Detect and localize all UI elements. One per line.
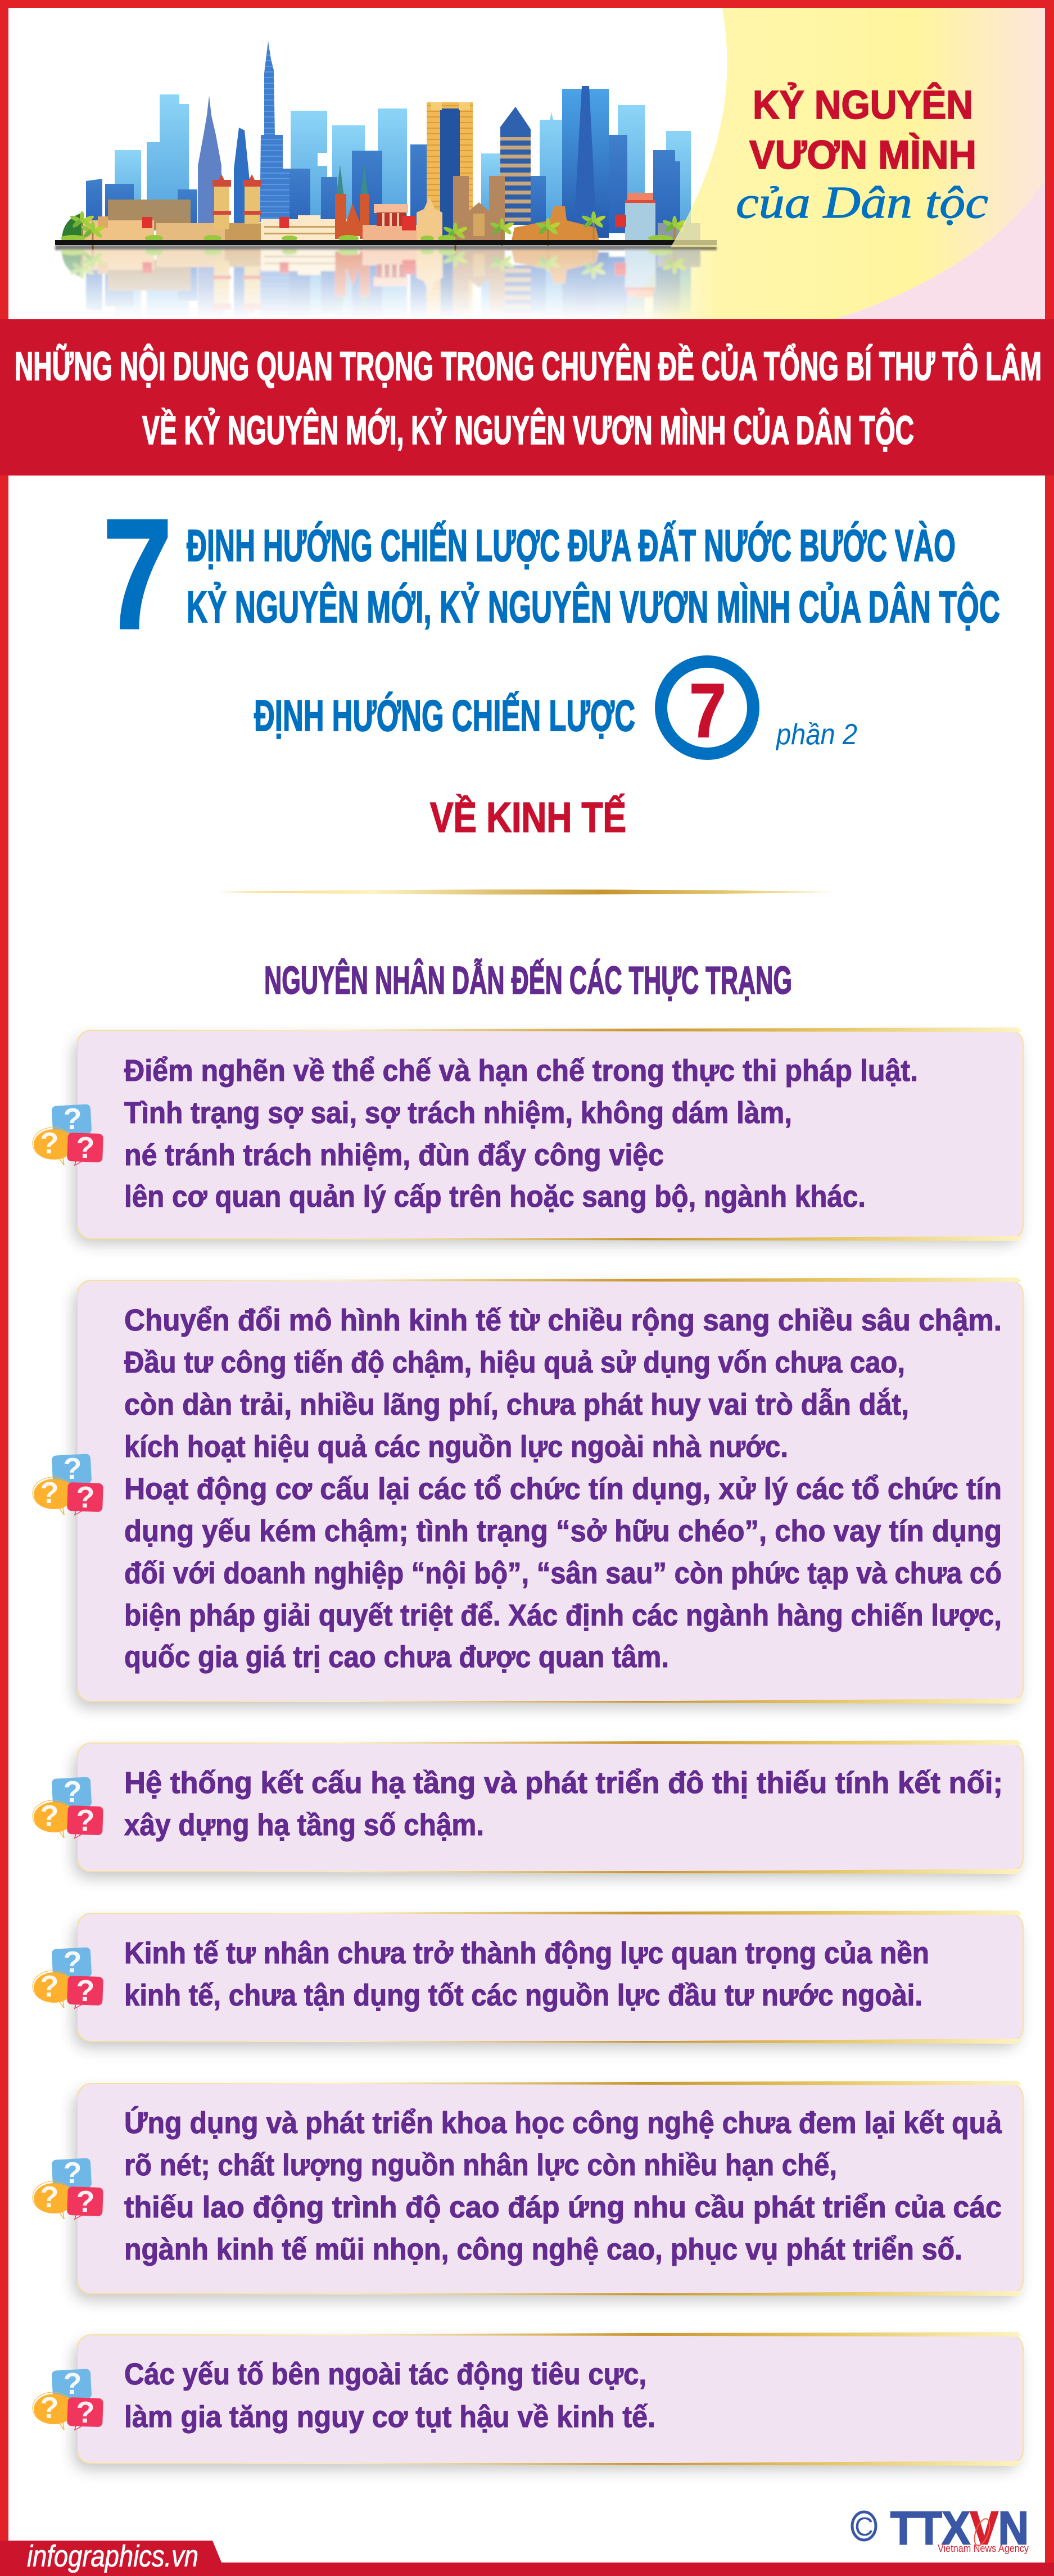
logo: TTXVN: C — [854, 2512, 874, 2541]
orientation heading with numbered circle: 7 — [689, 668, 726, 753]
card 5 text: ngành kinh tế mũi nhọn, công nghệ cao, phục vụ phát triển số. — [124, 2233, 962, 2266]
icon: question bubbles: ? — [40, 2391, 58, 2425]
card 4 text: Kinh tế tư nhân chưa trở thành động lực quan trọng của nền — [124, 1936, 929, 1970]
card 3 — [33, 1740, 1023, 1877]
card 6 text: Các yếu tố bên ngoài tác động tiêu cực, — [124, 2357, 646, 2391]
translucent yellow over skyline — [670, 8, 727, 247]
card 2 text: Đầu tư công tiến độ chậm, hiệu quả sử dụng vốn chưa cao, — [124, 1346, 905, 1379]
card 2 — [33, 1278, 1023, 1707]
big number 7: 7 — [102, 487, 173, 662]
icon: question bubbles — [33, 1452, 103, 1515]
icon: question bubbles: ? — [40, 1799, 58, 1833]
card 5 text: thiếu lao động trình độ cao đáp ứng nhu cầu phát triển của các — [124, 2190, 1002, 2224]
icon: question bubbles: ? — [40, 1970, 58, 2003]
section title — [187, 520, 1000, 632]
card 6 — [33, 2332, 1023, 2469]
subheading: economy: VỀ KINH TẾ — [430, 794, 626, 841]
hero title: VƯƠN MÌNH — [749, 133, 976, 178]
icon: question bubbles: ? — [63, 1452, 82, 1486]
card 2 text: kích hoạt hiệu quả các nguồn lực ngoài nhà nước. — [124, 1430, 788, 1464]
card 5 text: rõ nét; chất lượng nguồn nhân lực còn nhiều hạn chế, — [124, 2148, 837, 2182]
icon: question bubbles — [33, 1945, 103, 2008]
card 4 text: kinh tế, chưa tận dụng tốt các nguồn lực đầu tư nước ngoài. — [124, 1979, 922, 2012]
icon: question bubbles — [33, 1775, 103, 1838]
card 2 text — [124, 1303, 1002, 1674]
logo: TTXVN: TTXVN — [890, 2502, 1029, 2554]
gold divider — [219, 889, 837, 895]
card 1 text: lên cơ quan quản lý cấp trên hoặc sang bộ, ngành khác. — [124, 1180, 866, 1214]
card 3 text: xây dựng hạ tầng số chậm. — [124, 1808, 484, 1842]
red banner heading — [0, 319, 1054, 476]
card 2 text: dụng yếu kém chậm; tình trạng “sở hữu chéo”, cho vay tín dụng — [124, 1514, 1002, 1548]
card 1 text: Điểm nghẽn về thể chế và hạn chế trong thực thi pháp luật. — [124, 1054, 918, 1088]
card 5 — [33, 2081, 1023, 2299]
icon: question bubbles: ? — [76, 1974, 94, 2008]
logo: TTXVN: Vietnam News Agency — [938, 2543, 1029, 2554]
card 2 text: còn dàn trải, nhiều lãng phí, chưa phát huy vai trò dẫn dắt, — [124, 1388, 909, 1421]
card 4 text — [124, 1936, 929, 2012]
card 3 text — [124, 1766, 1003, 1842]
orientation heading with numbered circle: phần 2 — [775, 718, 857, 751]
card 1 text: né tránh trách nhiệm, đùn đẩy công việc — [124, 1138, 664, 1172]
card 4 — [33, 1911, 1023, 2047]
icon: question bubbles: ? — [76, 1131, 94, 1165]
orientation heading with numbered circle: ĐỊNH HƯỚNG CHIẾN LƯỢC — [254, 691, 635, 740]
card 3 text: Hệ thống kết cấu hạ tầng và phát triển đô thị thiếu tính kết nối; — [124, 1766, 1003, 1800]
icon: question bubbles: ? — [40, 1126, 58, 1160]
icon: question bubbles: ? — [40, 1476, 58, 1510]
icon: question bubbles: ? — [63, 1775, 82, 1809]
icon: question bubbles: ? — [76, 1804, 94, 1837]
footer bar with infographics.vn tab: infographics.vn — [27, 2539, 198, 2573]
icon: question bubbles: ? — [76, 2396, 94, 2429]
icon: question bubbles — [33, 2156, 103, 2219]
hero title — [736, 83, 988, 228]
icon: question bubbles: ? — [76, 1481, 94, 1514]
footer bar with infographics.vn tab — [0, 2539, 1054, 2576]
card 5 text — [124, 2106, 1002, 2266]
card 1 text — [124, 1054, 918, 1214]
icon: question bubbles: ? — [40, 2180, 58, 2214]
card 6 text: làm gia tăng nguy cơ tụt hậu về kinh tế. — [124, 2400, 655, 2434]
icon: question bubbles — [33, 1102, 103, 1165]
card 6 text — [124, 2357, 655, 2434]
icon: question bubbles: ? — [63, 1102, 82, 1136]
illustration: city skyline — [55, 41, 717, 251]
orientation heading with numbered circle — [254, 662, 857, 754]
card 1 text: Tình trạng sợ sai, sợ trách nhiệm, không dám làm, — [124, 1096, 792, 1130]
skyline reflection — [54, 245, 718, 315]
card 1 — [33, 1027, 1023, 1243]
hero background: yellow and pink shapes — [554, 8, 1045, 319]
card 2 text: quốc gia giá trị cao chưa được quan tâm. — [124, 1640, 669, 1674]
icon: question bubbles: ? — [63, 2156, 82, 2190]
card 2 text: Chuyển đổi mô hình kinh tế từ chiều rộng sang chiều sâu chậm. — [124, 1303, 1002, 1337]
icon: question bubbles: ? — [63, 2367, 82, 2401]
icon: question bubbles — [33, 2367, 103, 2430]
hero title: của Dân tộc — [736, 178, 988, 228]
icon: question bubbles: ? — [76, 2185, 94, 2219]
card 2 text: Hoạt động cơ cấu lại các tổ chức tín dụng, xử lý các tổ chức tín — [124, 1472, 1002, 1506]
hero title: KỶ NGUYÊN — [753, 83, 973, 128]
icon: question bubbles: ? — [63, 1945, 82, 1979]
card 5 text: Ứng dụng và phát triển khoa học công nghệ chưa đem lại kết quả — [124, 2106, 1002, 2140]
